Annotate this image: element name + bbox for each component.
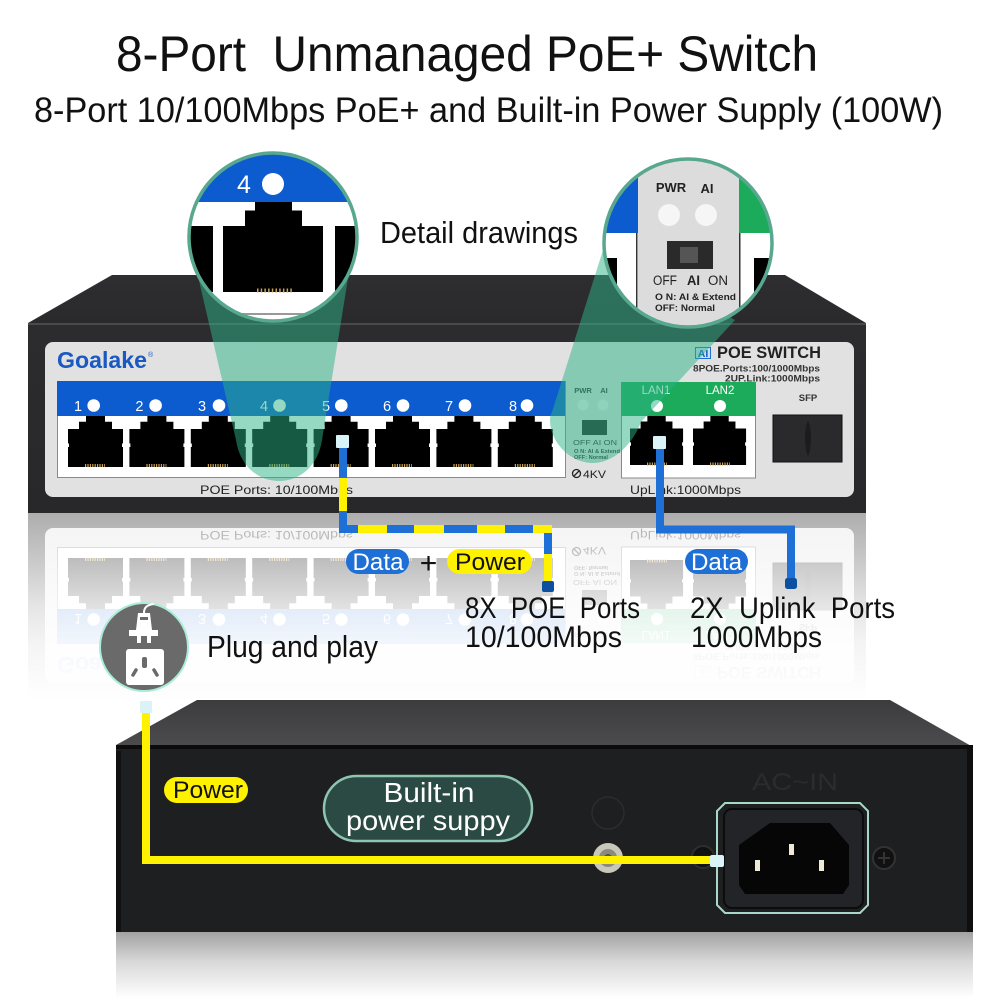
POE switch heading: 8POE.Ports:100/1000Mbps xyxy=(693,364,820,374)
power pill: Power xyxy=(455,549,525,576)
main title: 8-Port Unmanaged PoE+ Switch xyxy=(116,26,818,82)
PoE port block: 2 xyxy=(135,399,143,415)
rear switch reflection xyxy=(116,932,973,998)
AI switch status block: OFF AI ON xyxy=(573,438,617,447)
AI switch status block: AI xyxy=(600,386,608,395)
magnifier circle: AI switch detail: OFF: Normal xyxy=(655,303,715,314)
ground symbol xyxy=(592,797,624,829)
magnifier circle: AI switch detail xyxy=(600,155,780,330)
AC-IN marking: AC~IN xyxy=(752,769,838,796)
POE switch heading: 2UP.Link:1000Mbps xyxy=(725,374,820,384)
connector: data and power line xyxy=(336,435,554,592)
subtitle: 8-Port 10/100Mbps PoE+ and Built-in Power Supply (100W) xyxy=(34,91,943,130)
built-in power supply callout: power suppy xyxy=(346,805,510,836)
power inlet socket xyxy=(717,803,868,913)
PoE ports label: 10/100Mbps xyxy=(465,621,622,654)
magnifier beam: port 4 xyxy=(197,272,349,481)
PoE port block: 3 xyxy=(198,399,206,415)
magnifier circle: AI switch detail: AI xyxy=(687,273,700,288)
magnifier circle: AI switch detail: O N: AI & Extend xyxy=(655,292,736,303)
AI switch status block: OFF: Normal xyxy=(574,455,608,461)
magnifier circle: AI switch detail: PWR xyxy=(656,180,687,195)
AI switch status block: O N: AI & Extend xyxy=(574,449,620,455)
data pill: Data xyxy=(352,549,404,576)
PoE port block: 5 xyxy=(322,399,330,415)
rear switch: top cover xyxy=(116,700,973,747)
POE switch heading xyxy=(693,343,821,384)
connector: uplink data line xyxy=(653,436,797,589)
magnifier circle: port 4 detail xyxy=(180,150,365,325)
rear switch: back panel xyxy=(116,745,973,932)
magnifier circle: AI switch detail: AI xyxy=(700,181,714,196)
power connector line xyxy=(140,701,724,867)
uplink ports label: 1000Mbps xyxy=(691,621,822,654)
uplink ports label: 2X Uplink Ports xyxy=(690,592,895,625)
uplink port block: LAN1 xyxy=(642,385,670,397)
uplink port block: LAN2 xyxy=(706,385,734,397)
rear power pill: Power xyxy=(173,777,243,804)
PoE port block: 6 xyxy=(383,399,391,415)
POE switch heading: AI xyxy=(698,348,708,360)
uplink caption: UpLink:1000Mbps xyxy=(630,483,741,497)
uplink ports label xyxy=(690,592,895,654)
left screw xyxy=(692,846,714,868)
SFP port xyxy=(773,415,842,462)
PoE port block: 8 xyxy=(509,399,517,415)
PoE ports label xyxy=(465,592,640,654)
PoE port block: 7 xyxy=(445,399,453,415)
magnifier circle: AI switch detail: ON xyxy=(708,273,728,288)
AI switch status block xyxy=(572,386,620,481)
PoE port block: 1 xyxy=(74,399,82,415)
plug and play label: Plug and play xyxy=(207,629,378,664)
uplink data pill: Data xyxy=(691,549,743,576)
PoE ports caption: POE Ports: 10/100Mbps xyxy=(200,483,353,497)
uplink port block xyxy=(621,382,756,478)
front switch: body and faceplate xyxy=(28,323,866,513)
right screw xyxy=(873,847,895,869)
PoE port block xyxy=(57,381,566,478)
registered mark: ® xyxy=(148,351,154,359)
AI switch status block: PWR xyxy=(574,386,592,395)
detail drawings label: Detail drawings xyxy=(380,215,578,250)
magnifier beam: AI switch xyxy=(550,250,735,463)
AI switch status block: 4KV xyxy=(583,469,607,481)
front switch reflection xyxy=(0,512,1001,703)
magnifier circle: port 4 detail: 4 xyxy=(237,171,251,199)
PoE port block: 4 xyxy=(260,399,268,415)
brand logo: Goalake xyxy=(57,347,147,373)
ground stud xyxy=(593,843,623,873)
plus sign: + xyxy=(420,547,437,580)
front switch: top cover xyxy=(28,275,866,323)
POE switch heading: POE SWITCH xyxy=(717,343,821,362)
PoE ports label: 8X POE Ports xyxy=(465,592,640,625)
built-in power supply callout: Built-in xyxy=(384,777,474,808)
built-in power supply callout xyxy=(324,776,532,841)
SFP label: SFP xyxy=(799,393,818,404)
magnifier circle: AI switch detail: OFF xyxy=(653,273,677,288)
icon: plug and socket xyxy=(100,603,188,691)
